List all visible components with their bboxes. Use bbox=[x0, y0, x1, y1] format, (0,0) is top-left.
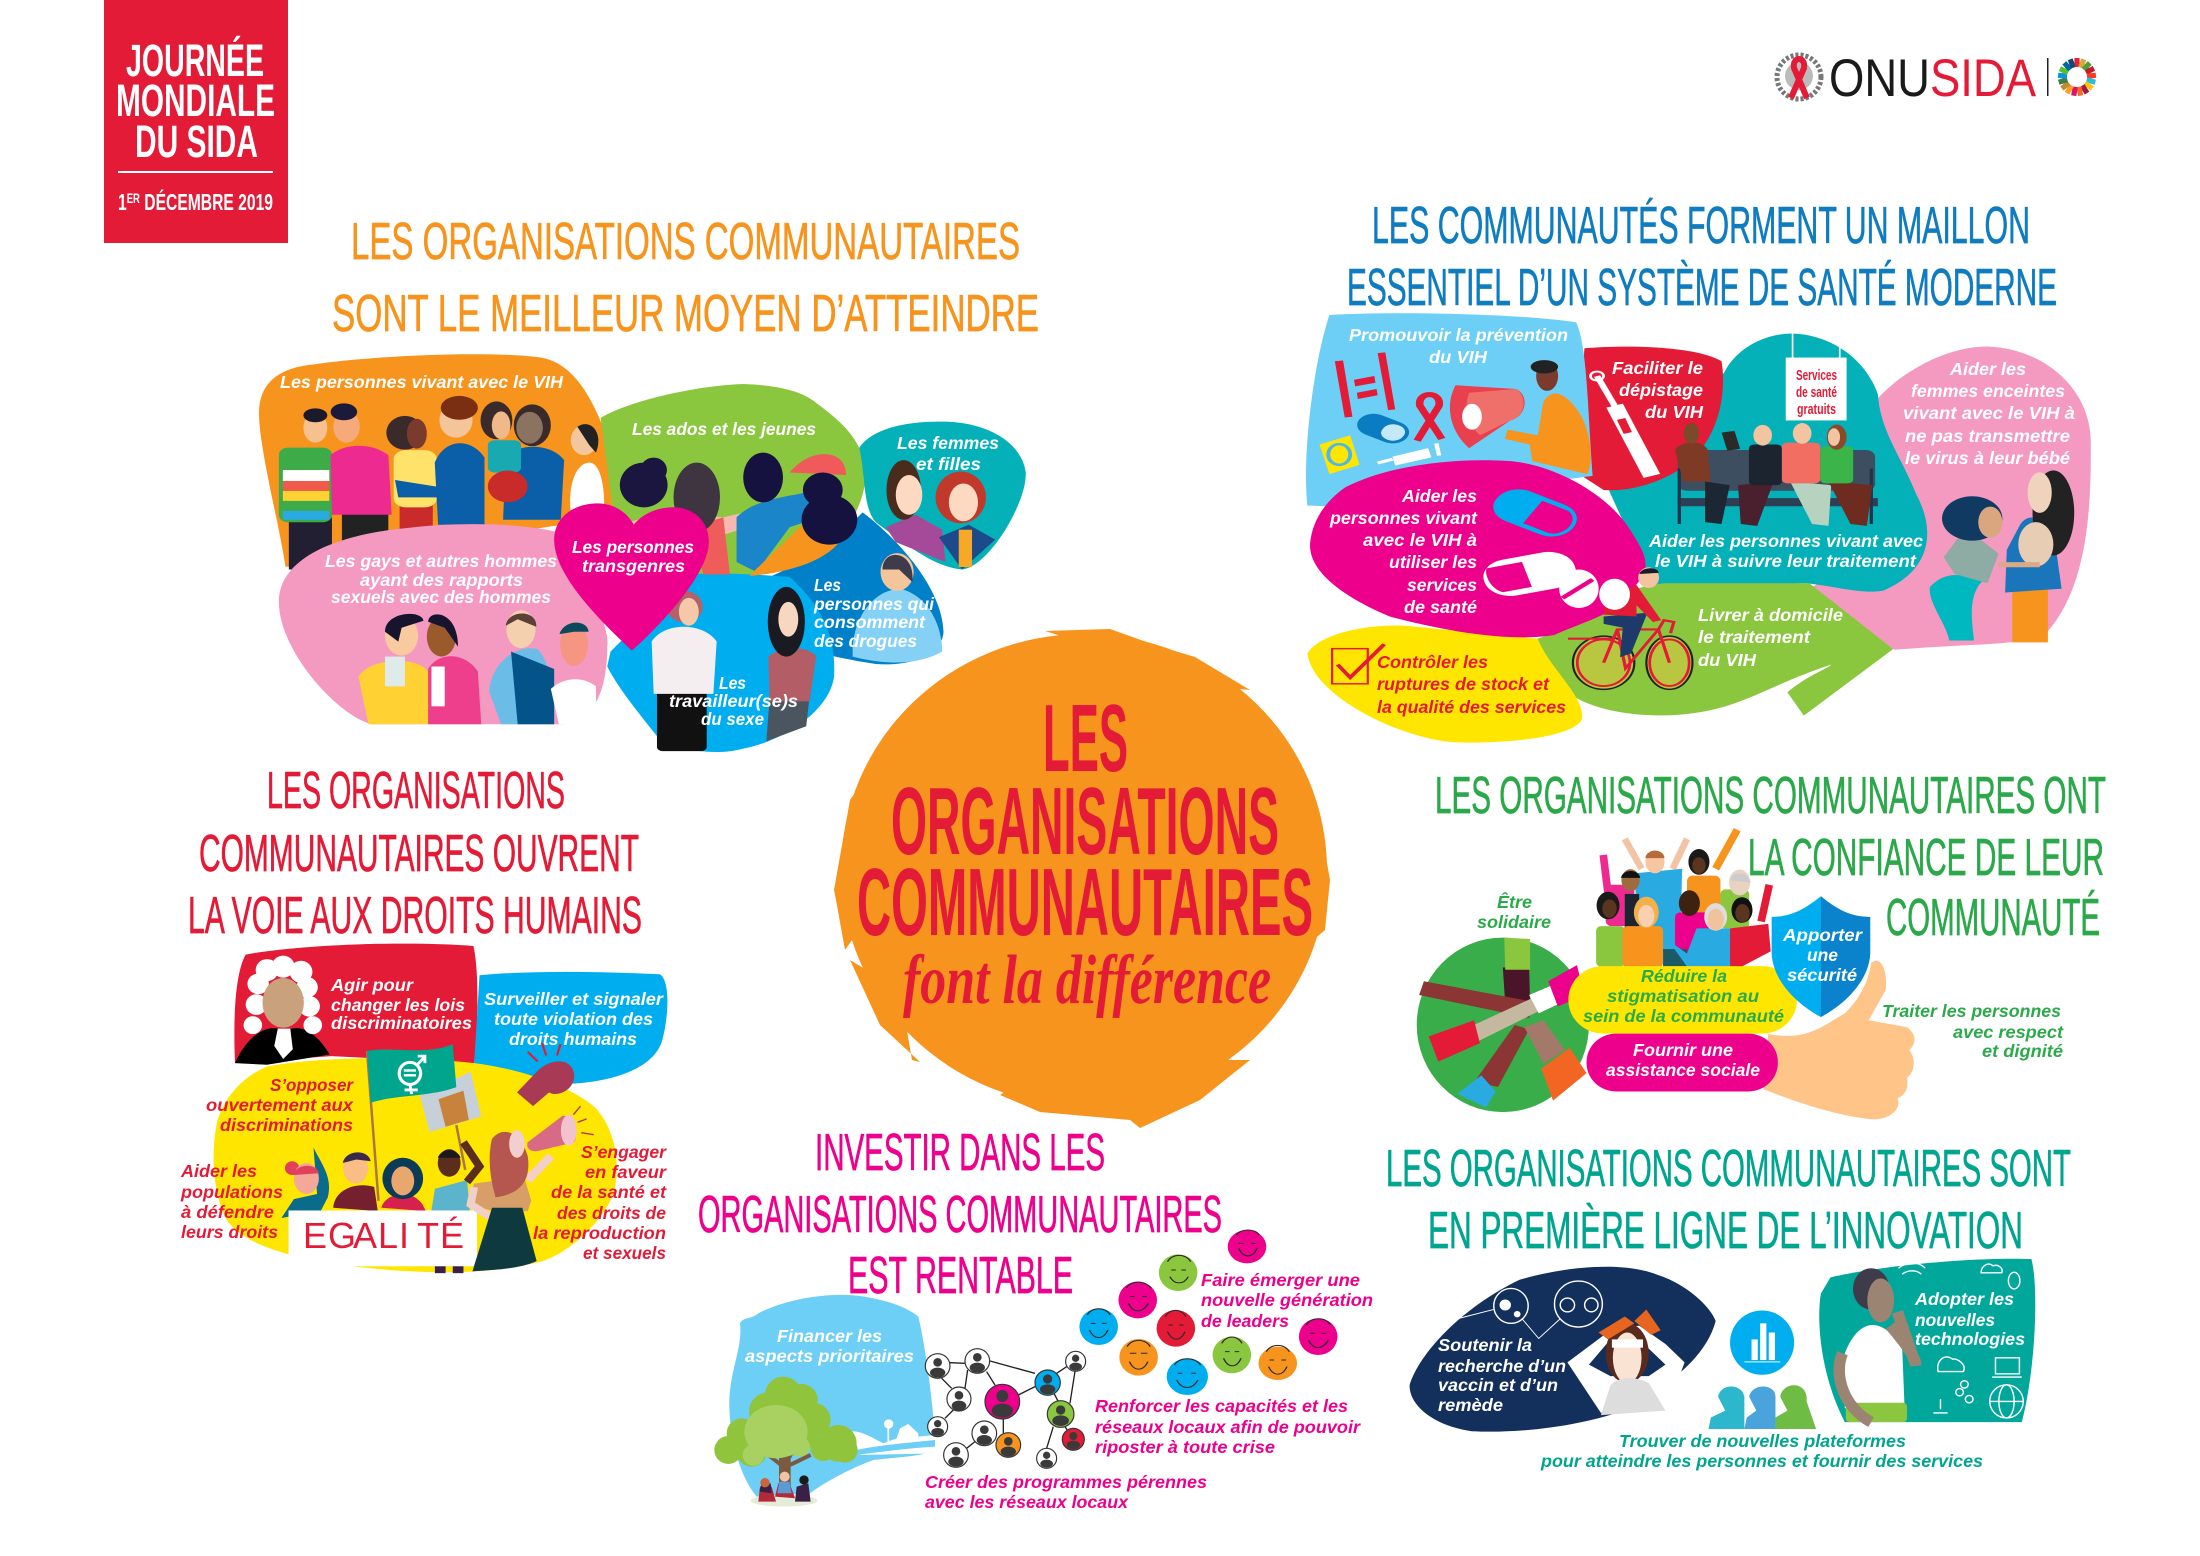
text: health system labels bbox=[1329, 325, 2075, 717]
center badge: title: COMMUNAUTAIRES bbox=[857, 849, 1313, 956]
heads bbox=[1709, 1386, 1744, 1429]
cyclist bbox=[1573, 636, 1634, 689]
text: trust labels: sein de la communauté bbox=[1583, 1006, 1784, 1026]
heading: magenta: INVESTIR DANS LES bbox=[815, 1124, 1105, 1182]
panel: populations bbox=[259, 354, 1026, 752]
text: health system labels: ne pas transmettre bbox=[1905, 426, 2070, 446]
text: population labels: Les personnes vivant avec le VIH bbox=[280, 372, 563, 392]
heading: red: LA VOIE AUX DROITS HUMAINS bbox=[188, 887, 642, 945]
text: population labels: Les femmes bbox=[897, 433, 999, 453]
text: health system labels: Faciliter le bbox=[1612, 358, 1703, 378]
panel: human rights bbox=[180, 944, 667, 1273]
text: trust labels: sécurité bbox=[1787, 965, 1857, 985]
text: human rights labels: changer les lois bbox=[331, 995, 465, 1015]
text: health system labels: du VIH bbox=[1429, 347, 1487, 367]
green people bbox=[614, 502, 790, 542]
crowd bbox=[1625, 839, 1687, 869]
sign bbox=[1792, 334, 1793, 358]
text: human rights labels: toute violation des bbox=[494, 1009, 653, 1029]
text: human rights labels: droits humains bbox=[509, 1029, 637, 1049]
text: trust labels: Réduire la bbox=[1641, 966, 1727, 986]
text: health system labels: Promouvoir la prévention bbox=[1349, 325, 1568, 345]
text: human rights labels: discriminatoires bbox=[331, 1013, 472, 1033]
text: innovation labels: vaccin et d’un bbox=[1438, 1375, 1558, 1395]
illustration: health system blobs and icons bbox=[1306, 313, 2091, 743]
text: investment labels: avec les réseaux locaux bbox=[925, 1492, 1129, 1512]
text: human rights labels: EGALITÉ bbox=[303, 1215, 464, 1256]
text: health system labels: utiliser les bbox=[1389, 552, 1477, 572]
text: health system labels: vivant avec le VIH à bbox=[1903, 403, 2075, 423]
center badge: title: font la différence bbox=[903, 942, 1271, 1019]
text: health system labels: Aider les bbox=[1401, 486, 1477, 506]
drug user figure bbox=[853, 589, 942, 663]
text: human rights labels: Agir pour bbox=[330, 975, 414, 995]
text: health system labels: femmes enceintes bbox=[1911, 381, 2065, 401]
badge: Journée mondiale du sida: DU SIDA bbox=[135, 116, 258, 167]
text: health system labels: gratuits bbox=[1797, 401, 1836, 418]
text: human rights labels: leurs droits bbox=[181, 1222, 278, 1242]
text: health system labels: la qualité des services bbox=[1377, 697, 1566, 717]
text: population labels: ayant des rapports bbox=[360, 570, 523, 590]
text: population labels: consomment bbox=[814, 612, 926, 632]
pills bbox=[1484, 483, 1586, 542]
text: trust labels: Fournir une bbox=[1633, 1040, 1733, 1060]
sex workers bbox=[657, 686, 707, 751]
text: health system labels: ruptures de stock et bbox=[1377, 674, 1550, 694]
icon: test stick bbox=[1597, 376, 1615, 406]
text: human rights labels: et sexuels bbox=[583, 1243, 666, 1263]
heading: red: LES ORGANISATIONS bbox=[267, 762, 565, 820]
text: population labels: personnes qui bbox=[813, 594, 935, 614]
text: health system labels: Aider les bbox=[1949, 359, 2026, 379]
text: trust labels: Traiter les personnes bbox=[1882, 1001, 2061, 1021]
heading: red: COMMUNAUTAIRES OUVRENT bbox=[199, 825, 639, 883]
text: human rights labels: la reproduction bbox=[533, 1223, 666, 1243]
flag bbox=[367, 1051, 378, 1201]
text: population labels: Les gays et autres hommes bbox=[325, 551, 557, 571]
text: trust labels bbox=[1477, 891, 2064, 1080]
illustration: trust hand, crowd, shield bbox=[1410, 830, 2035, 1432]
text: trust labels: Apporter bbox=[1782, 925, 1863, 945]
protesters bbox=[281, 1147, 329, 1218]
network edges bbox=[942, 1361, 1075, 1448]
text: population labels bbox=[280, 372, 999, 729]
text: human rights labels: ouvertement aux bbox=[206, 1095, 354, 1115]
text: investment labels bbox=[745, 1270, 1373, 1512]
text: population labels: des drogues bbox=[814, 631, 917, 651]
text: health system labels: personnes vivant bbox=[1329, 508, 1478, 528]
badge: Journée mondiale du sida: ER bbox=[127, 190, 140, 206]
illustration: leader faces bbox=[1079, 1230, 1337, 1395]
illustration: blue blob, tree and network bbox=[714, 1295, 1086, 1507]
text: investment labels: riposter à toute crise bbox=[1095, 1437, 1275, 1457]
text: human rights labels: de la santé et bbox=[551, 1182, 667, 1202]
text: human rights labels: des droits de bbox=[557, 1203, 666, 1223]
text: trust labels: solidaire bbox=[1477, 912, 1551, 932]
heading: magenta: ORGANISATIONS COMMUNAUTAIRES bbox=[698, 1186, 1222, 1244]
text: innovation labels bbox=[1438, 1289, 2025, 1471]
people under tree bbox=[751, 1495, 817, 1507]
panel: community trust bbox=[1410, 830, 2064, 1432]
network nodes bbox=[925, 1349, 1086, 1468]
text: investment labels: Financer les bbox=[777, 1326, 882, 1346]
text: human rights labels: Surveiller et signaler bbox=[484, 989, 664, 1009]
text: health system labels: dépistage bbox=[1619, 380, 1703, 400]
text: investment labels: de leaders bbox=[1201, 1311, 1289, 1331]
text: human rights labels: S’engager bbox=[581, 1142, 667, 1162]
text: population labels: et filles bbox=[916, 454, 981, 474]
pink panel men bbox=[358, 661, 428, 724]
text: investment labels: Renforcer les capacités et les bbox=[1095, 1396, 1348, 1416]
text: investment labels: aspects prioritaires bbox=[745, 1346, 914, 1366]
text: investment labels: Créer des programmes pérennes bbox=[925, 1472, 1207, 1492]
text: innovation labels: Soutenir la bbox=[1438, 1335, 1532, 1355]
pills and shield bbox=[1568, 966, 1797, 1034]
text: trust labels: assistance sociale bbox=[1606, 1060, 1760, 1080]
heading: orange: SONT LE MEILLEUR MOYEN D’ATTEINDRE bbox=[332, 285, 1039, 343]
text: investment labels: nouvelle génération bbox=[1201, 1290, 1373, 1310]
panel: investment bbox=[714, 1230, 1373, 1512]
judge bbox=[235, 1028, 330, 1065]
text: human rights labels: à défendre bbox=[181, 1202, 274, 1222]
text: health system labels: avec le VIH à bbox=[1363, 530, 1477, 550]
icons: prevention bbox=[1335, 352, 1395, 417]
text: health system labels: Services bbox=[1796, 367, 1837, 384]
heading: green bbox=[1435, 767, 2106, 947]
text: population labels: Les bbox=[814, 575, 841, 595]
text: human rights labels: Aider les bbox=[180, 1161, 257, 1181]
thumb bbox=[1764, 961, 1915, 1119]
text: trust labels: stigmatisation au bbox=[1607, 986, 1759, 1006]
text: population labels: du sexe bbox=[701, 709, 764, 729]
center badge: title: LES bbox=[1043, 685, 1128, 792]
panel: health system bbox=[1306, 313, 2091, 743]
text: investment labels: Faire émerger une bbox=[1201, 1270, 1360, 1290]
text: trust labels: Être bbox=[1497, 891, 1532, 912]
heart bbox=[554, 503, 709, 651]
text: innovation labels: remède bbox=[1438, 1395, 1503, 1415]
illustration: human rights blobs and figures bbox=[214, 944, 667, 1273]
chart icon bbox=[1730, 1310, 1794, 1375]
text: trust labels: une bbox=[1807, 945, 1838, 965]
badge: Journée mondiale du sida bbox=[104, 0, 288, 243]
text: health system labels: services bbox=[1407, 575, 1477, 595]
teal people bbox=[886, 515, 946, 562]
heading: teal bbox=[1386, 1140, 2071, 1260]
tree bbox=[779, 1455, 791, 1487]
landscape bbox=[850, 1424, 935, 1455]
teal tech panel bbox=[1819, 1259, 2035, 1422]
checkbox bbox=[1332, 649, 1368, 684]
text: population labels: Les ados et les jeunes bbox=[632, 419, 816, 439]
text: health system labels: du VIH bbox=[1645, 402, 1703, 422]
heading: orange bbox=[332, 213, 1039, 343]
text: innovation labels: nouvelles bbox=[1915, 1310, 1995, 1330]
text: population labels: travailleur(se)s bbox=[669, 691, 798, 711]
heading: magenta bbox=[698, 1124, 1222, 1305]
text: human rights labels: S’opposer bbox=[270, 1075, 354, 1095]
text: health system labels: Aider les personnes vivant avec bbox=[1648, 531, 1923, 551]
hands bbox=[1503, 967, 1530, 1004]
center badge: title bbox=[834, 629, 1330, 1128]
brush circle bbox=[834, 629, 1330, 1128]
heading: red bbox=[188, 762, 642, 945]
logo: ONUSIDA: ONUSIDA bbox=[1829, 49, 2037, 108]
text: innovation labels: Trouver de nouvelles plateformes bbox=[1619, 1431, 1906, 1451]
heading: orange: LES ORGANISATIONS COMMUNAUTAIRES bbox=[351, 213, 1020, 271]
text: health system labels: de santé bbox=[1404, 597, 1477, 617]
illustration: population blobs and figures bbox=[259, 354, 1026, 752]
center badge: title: ORGANISATIONS bbox=[891, 768, 1279, 875]
text: trust labels: et dignité bbox=[1982, 1041, 2063, 1061]
text: trust labels: avec respect bbox=[1953, 1022, 2064, 1042]
heading: blue bbox=[1347, 197, 2057, 317]
pregnant women bbox=[1930, 575, 1982, 641]
scientist bbox=[1567, 1326, 1685, 1413]
heading: magenta: EST RENTABLE bbox=[848, 1247, 1073, 1305]
text: human rights labels: populations bbox=[180, 1182, 283, 1202]
text: population labels: sexuels avec des hommes bbox=[331, 587, 551, 607]
text: innovation labels: recherche d’un bbox=[1438, 1356, 1566, 1376]
text: human rights labels: discriminations bbox=[220, 1115, 353, 1135]
text: health system labels: Contrôler les bbox=[1377, 652, 1488, 672]
text: human rights labels: en faveur bbox=[585, 1162, 667, 1182]
badge: Journée mondiale du sida: 1 bbox=[118, 189, 131, 215]
bench people bbox=[1678, 450, 1875, 491]
badge: Journée mondiale du sida: DÉCEMBRE 2019 bbox=[140, 188, 273, 215]
badge: Journée mondiale du sida: JOURNÉE bbox=[126, 35, 264, 86]
text: health system labels: le virus à leur bébé bbox=[1905, 448, 2070, 468]
badge: Journée mondiale du sida: MONDIALE bbox=[116, 75, 275, 126]
text: population labels: transgenres bbox=[582, 556, 685, 576]
text: health system labels: le VIH à suivre leur traitement bbox=[1655, 551, 1917, 571]
text: health system labels: Livrer à domicile bbox=[1698, 605, 1843, 625]
text: health system labels: du VIH bbox=[1698, 650, 1756, 670]
text: innovation labels: pour atteindre les personnes et fournir des services bbox=[1540, 1451, 1983, 1471]
text: population labels: Les bbox=[719, 673, 746, 693]
text: human rights labels bbox=[180, 975, 667, 1263]
text: population labels: Les personnes bbox=[572, 537, 694, 557]
text: innovation labels: technologies bbox=[1915, 1329, 2025, 1349]
text: health system labels: le traitement bbox=[1698, 627, 1811, 647]
text: health system labels: de santé bbox=[1796, 384, 1837, 401]
whistle bbox=[517, 1061, 574, 1106]
orange people bbox=[289, 517, 332, 570]
text: investment labels: réseaux locaux afin de pouvoir bbox=[1095, 1417, 1361, 1437]
innovation navy blob bbox=[1410, 1267, 1716, 1432]
text: innovation labels: Adopter les bbox=[1914, 1289, 2014, 1309]
megaphone bbox=[527, 1116, 576, 1151]
